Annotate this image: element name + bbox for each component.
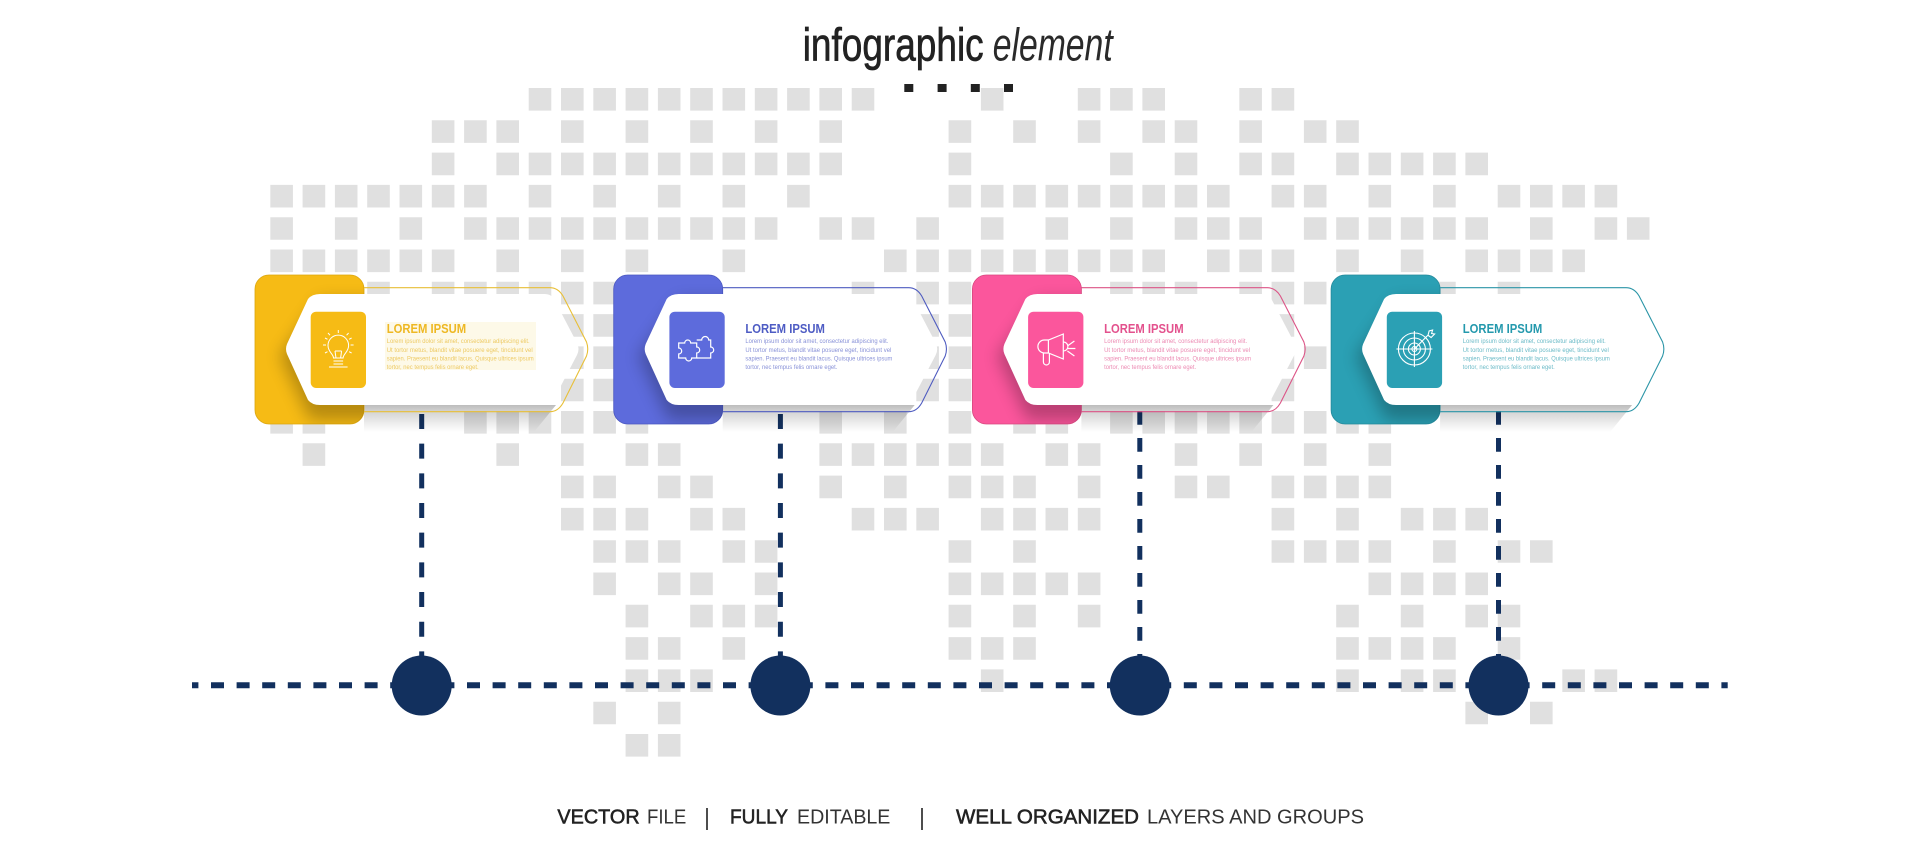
horizontal dashed timeline xyxy=(192,682,1728,688)
body text: sapien. Praesent eu blandit lacus. Quisque ultrices ipsum xyxy=(1463,355,1610,362)
title dots xyxy=(904,84,1013,92)
timeline node 2 xyxy=(750,656,810,716)
footer text xyxy=(557,806,1364,830)
hexagon outline xyxy=(1081,288,1305,412)
title: infographic xyxy=(803,19,984,71)
icon: megaphone xyxy=(1038,334,1075,365)
hexagon outline xyxy=(723,288,946,412)
icon: light bulb xyxy=(323,330,354,367)
panel: step 2 blue xyxy=(614,275,946,432)
footer text: VECTOR xyxy=(557,806,640,828)
footer text: WELL ORGANIZED xyxy=(956,806,1139,828)
hexagon outline xyxy=(364,288,588,412)
coloured tab xyxy=(614,275,723,424)
white body xyxy=(645,294,937,405)
connector: step 3 xyxy=(1137,411,1142,660)
hexagon outline xyxy=(1440,288,1664,412)
body text: Lorem ipsum dolor sit amet, consectetur adipiscing elit. xyxy=(1104,338,1247,345)
coloured tab xyxy=(972,275,1081,424)
footer text: EDITABLE xyxy=(797,806,890,828)
text backing xyxy=(385,322,536,370)
body text xyxy=(1463,338,1610,371)
body text: Lorem ipsum dolor sit amet, consectetur adipiscing elit. xyxy=(745,338,888,345)
connector: step 4 xyxy=(1496,411,1501,660)
icon: puzzle xyxy=(679,336,714,361)
body text xyxy=(745,338,893,371)
white body xyxy=(286,294,578,405)
footer text: FILE xyxy=(647,806,686,828)
body text: Lorem ipsum dolor sit amet, consectetur adipiscing elit. xyxy=(1463,338,1606,345)
body text: Ut tortor metus, blandit vitae posuere eget, tincidunt vel xyxy=(1104,347,1251,354)
body text: sapien. Praesent eu blandit lacus. Quisque ultrices ipsum xyxy=(745,355,893,362)
body text: tortor, nec tempus felis ornare eget. xyxy=(1463,364,1555,371)
footer text: FULLY xyxy=(730,806,788,828)
heading: LOREM IPSUM xyxy=(387,322,466,336)
connector: step 1 xyxy=(419,414,424,660)
timeline node 3 xyxy=(1110,656,1170,716)
icon tile xyxy=(1028,312,1083,388)
icon tile xyxy=(1387,312,1442,388)
body text: tortor, nec tempus felis ornare eget. xyxy=(1104,364,1196,371)
body text: Lorem ipsum dolor sit amet, consectetur adipiscing elit. xyxy=(387,338,530,345)
heading: LOREM IPSUM xyxy=(1104,322,1184,336)
body text xyxy=(387,338,534,371)
body text: Ut tortor metus, blandit vitae posuere eget, tincidunt vel xyxy=(745,347,892,354)
white body xyxy=(1003,294,1296,405)
body text: Ut tortor metus, blandit vitae posuere eget, tincidunt vel xyxy=(1463,347,1609,354)
footer text: LAYERS AND GROUPS xyxy=(1147,806,1364,828)
title: element xyxy=(993,19,1114,71)
icon tile xyxy=(311,312,366,388)
heading: LOREM IPSUM xyxy=(1463,322,1542,336)
timeline node 1 xyxy=(392,656,452,716)
heading: LOREM IPSUM xyxy=(745,322,825,336)
body text: Ut tortor metus, blandit vitae posuere eget, tincidunt vel xyxy=(387,347,533,354)
body text: tortor, nec tempus felis ornare eget. xyxy=(387,364,479,371)
coloured tab xyxy=(255,275,364,424)
body text: tortor, nec tempus felis ornare eget. xyxy=(745,364,837,371)
white body xyxy=(1362,294,1655,405)
panel: step 4 teal xyxy=(1331,275,1664,432)
body text: sapien. Praesent eu blandit lacus. Quisque ultrices ipsum xyxy=(387,355,534,362)
panel: step 1 yellow xyxy=(255,275,588,432)
panel: step 3 pink xyxy=(972,275,1305,432)
coloured tab xyxy=(1331,275,1440,424)
background pixel pattern xyxy=(270,88,1650,757)
icon tile xyxy=(669,312,725,388)
timeline node 4 xyxy=(1468,656,1528,716)
connector: step 2 xyxy=(778,414,783,660)
body text: sapien. Praesent eu blandit lacus. Quisque ultrices ipsum xyxy=(1104,355,1251,362)
icon: target xyxy=(1396,330,1435,367)
body text xyxy=(1104,338,1251,371)
